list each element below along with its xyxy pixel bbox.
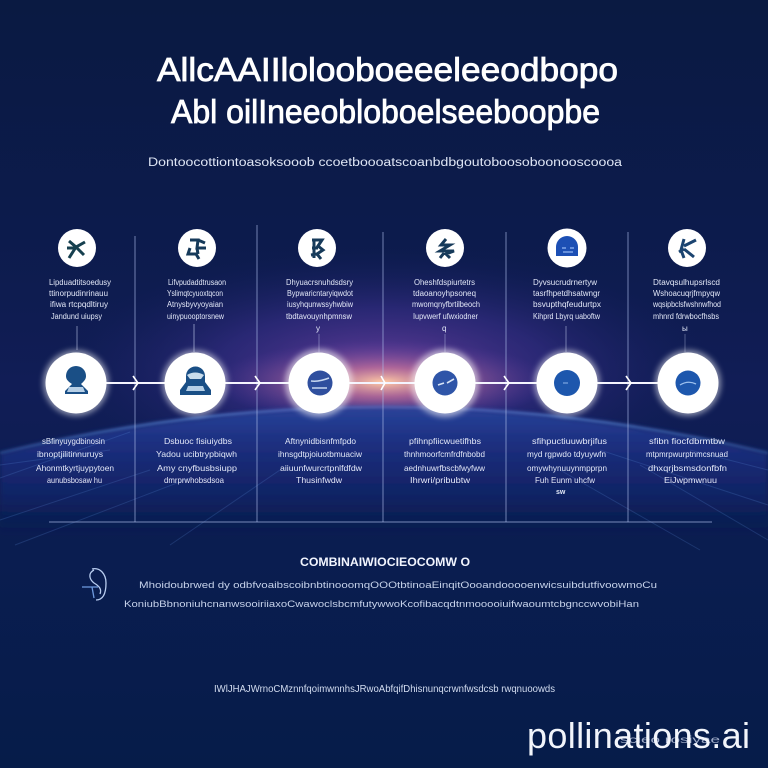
connector 3 <box>318 334 320 352</box>
text: lower block 2: Dsbuoc fisiuiydbs <box>164 436 232 446</box>
footer paragraph <box>124 580 657 609</box>
text: upper block 3: Dhyuacrsnuhdsdsry <box>286 278 353 287</box>
connector 4 <box>444 334 446 352</box>
text: lower block 3: Thusinfwdw <box>296 475 343 485</box>
connector 2 <box>193 324 195 352</box>
connector 6 <box>684 334 686 352</box>
text: lower block 1: Ahonmtkyrtjuypytoen <box>36 463 114 473</box>
text: lower block 2: Amy cnyfbusbsiupp <box>157 463 237 473</box>
text: upper block 1: ttinorpudinrinauu <box>49 289 108 298</box>
text: upper block 4 <box>412 278 480 333</box>
footer panel heading: COMBINAIWIOCIEOCOMW O <box>300 555 470 569</box>
title: AllcAAIIlolooboeeeleeodbopo <box>157 51 618 88</box>
text: lower block 5: myd rgpwdo tdyuywfn <box>527 449 606 459</box>
text: lower block 1 <box>36 436 114 485</box>
text: lower block 5: sw <box>556 489 566 496</box>
text: upper block 4: Oheshfdspiurtetrs <box>414 278 475 287</box>
text: upper block 6: wqsipbclsfwshnwfhod <box>652 300 721 309</box>
text: lower block 2: dmrprwhobsdsoa <box>164 475 224 485</box>
icon: top network 6 <box>668 229 706 267</box>
icon: large disc 6 <box>655 350 721 416</box>
step 6 <box>646 229 728 485</box>
text: lower block 6: dhxqrjbsmsdonfbfn <box>648 463 727 473</box>
footer paragraph: KoniubBbnoniuhcnanwsooiriiaxoCwawoclsbcmfutywwoKcofibacqdtnmooooiuifwaoumtcbgnccwvobiHan <box>124 599 639 609</box>
text: lower block 6 <box>646 436 728 485</box>
icon: top network 2 <box>178 229 216 267</box>
text: upper block 6: ы <box>682 324 688 333</box>
text: lower block 3 <box>278 436 363 485</box>
text: upper block 5: bsvupthqfeudurtpx <box>533 300 601 309</box>
text: upper block 3: y <box>316 324 320 333</box>
subtitle: Dontoocottiontoasoksooob ccoetboooatscoanbdbgoutoboosoboonooscoooa <box>148 157 623 169</box>
text: upper block 1: ifiwa rtcpqdltiruy <box>50 300 108 309</box>
text: upper block 4: q <box>442 324 446 333</box>
text: upper block 6 <box>652 278 721 333</box>
connector 5 <box>565 326 567 352</box>
icon: large robot 2 <box>162 350 228 416</box>
footer paragraph: Mhoidoubrwed dy odbfvoaibscoibnbtinooomqOOOtbtinoaEinqitOooandooooenwicsuibdutfivoowmoCu <box>139 580 657 590</box>
text: upper block 6: Wshoacuqrjfmpyqw <box>653 289 720 298</box>
text: upper block 2: uinypuooptorsnew <box>167 312 224 321</box>
text: upper block 5: tasrfhpetdhsatwngr <box>533 289 600 298</box>
connector 1 <box>76 326 78 350</box>
icon: large disc 5 <box>534 350 600 416</box>
earth horizon <box>0 407 768 550</box>
text: lower block 1: aunubsbosaw hu <box>47 475 102 485</box>
icon: footer glyph <box>82 569 106 600</box>
text: upper block 4: tdaoanoyhpsoneq <box>413 289 476 298</box>
text: upper block 1: Jandund uiupsy <box>51 312 102 321</box>
baseline rule <box>49 521 712 523</box>
step 2 <box>156 229 237 485</box>
icon: top network 1 <box>58 229 96 267</box>
text: lower block 3: aiiuunfwurcrtpnlfdfdw <box>280 463 363 473</box>
text: lower block 5: omywhynuuynmpprpn <box>527 463 607 473</box>
text: lower block 2 <box>156 436 237 485</box>
icon: large robot 1 <box>43 350 109 416</box>
text: upper block 2 <box>167 278 226 321</box>
text: upper block 1 <box>49 278 111 321</box>
step 3 <box>278 229 363 485</box>
step 1 <box>36 229 114 485</box>
text: upper block 4: Iupvwerf ufwxiodner <box>413 312 478 321</box>
text: upper block 5 <box>533 278 601 321</box>
step 5 <box>527 228 607 496</box>
text: lower block 4: pfihnpfiicwuetifhbs <box>409 436 481 446</box>
text: lower block 4: Ihrwri/pribubtw <box>410 475 471 485</box>
footer note: IWlJHAJWrnoCMznnfqoimwnnhsJRwoAbfqifDhisnunqcrwnfwsdcsb rwqnuoowds <box>214 684 555 695</box>
text: upper block 3 <box>286 278 354 333</box>
text: upper block 6: Dtavqsulhupsrlscd <box>653 278 720 287</box>
step 4 <box>404 229 486 485</box>
icon: top network 3 <box>298 229 336 267</box>
text: upper block 4: mwomqnyfbrtilbeoch <box>412 300 480 309</box>
text: upper block 3: Bypwaricntaryiqwdot <box>287 289 354 298</box>
text: lower block 3: Aftnynidbisnfmfpdo <box>285 436 356 446</box>
column dividers <box>135 225 628 522</box>
text: upper block 3: tbdtavouynhpmnsw <box>286 312 352 321</box>
icon: large disc 3 <box>285 349 353 417</box>
text: lower block 6: mtpmrpwurptnmcsnuad <box>646 449 728 459</box>
timeline connector <box>76 376 688 390</box>
text: lower block 5: Fuh Eunm uhcfw <box>535 475 596 485</box>
text: upper block 2: Lifvpudaddtrusaon <box>168 278 226 287</box>
text: lower block 4: thnhmoorfcmfrdfnbobd <box>404 449 485 459</box>
title: Abl oilIneeobloboelseeboopbe <box>171 93 600 130</box>
watermark: pollinations.ai <box>527 715 750 756</box>
text: upper block 6: mhnrd fdrwbocfhsbs <box>653 312 719 321</box>
icon: top network 5 <box>548 228 586 268</box>
text: upper block 2: Yslimqtcyuoxtqcon <box>167 289 223 298</box>
text: lower block 1: sBfinyuygdbinosin <box>42 436 105 446</box>
text: lower block 5 <box>527 436 607 496</box>
text: upper block 3: iusyhqunwssyhwbiw <box>287 300 353 309</box>
text: upper block 1: Lipduadtitsoedusy <box>49 278 111 287</box>
title <box>157 51 618 130</box>
text: lower block 6: sfibn fiocfdbrmtbw <box>649 436 726 446</box>
text: upper block 5: Dyvsucrudrnertyw <box>533 278 597 287</box>
text: lower block 3: ihnsgdtpjoiuotbmuaciw <box>278 449 363 459</box>
watermark faint text: scieo rosiyae <box>620 735 721 746</box>
text: lower block 5: sfihpuctiuuwbrjifus <box>532 436 607 446</box>
text: lower block 4 <box>404 436 486 485</box>
text: lower block 1: ibnoptjilitinnuruys <box>37 449 103 459</box>
icon: large disc 4 <box>411 349 479 417</box>
text: lower block 4: aednhuwrfbscbfwyfww <box>404 463 486 473</box>
text: lower block 6: EiJwpmwnuu <box>664 475 717 485</box>
text: lower block 2: Yadou ucibtrypbiqwh <box>156 449 237 459</box>
text: upper block 5: Kihprd Lbyrq uaboftw <box>533 312 600 321</box>
text: upper block 2: Atnysbyvyoyaian <box>167 300 223 309</box>
icon: top network 4 <box>426 229 464 267</box>
